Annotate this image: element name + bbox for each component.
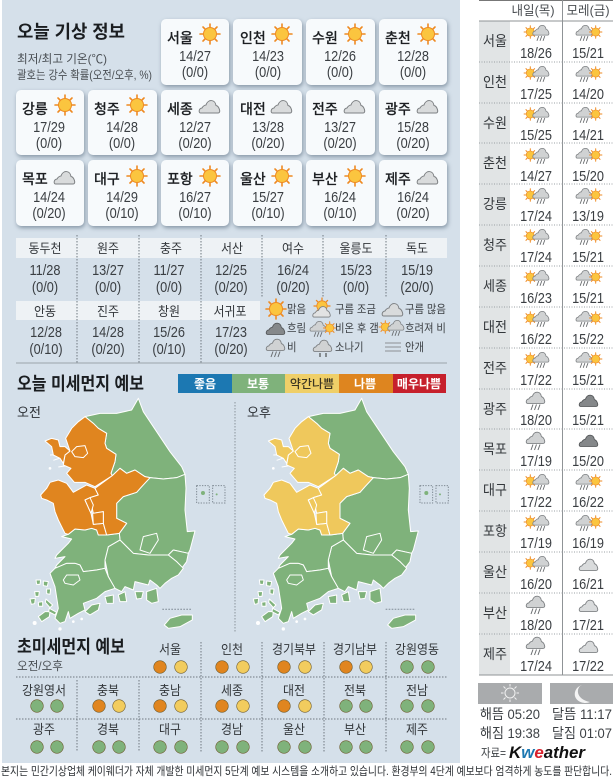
row: 서울: 18/26 [520, 44, 552, 61]
card: 청주: 청주 [94, 101, 120, 117]
row: 포항: 16/19 [572, 534, 604, 551]
sun times box: 해뜸 05:20 [480, 706, 540, 722]
row: 수원: 14/21 [572, 126, 604, 143]
card: 수원: 12/26 [324, 47, 356, 64]
fine dust grid: 세종 [221, 684, 243, 698]
card: 인천: 14/23 [252, 47, 284, 64]
card: 인천 [233, 19, 302, 85]
row: 춘천: 춘천 [483, 156, 507, 171]
subtitle text: 최저/최고 기온(℃) [17, 52, 107, 66]
legend: weather icons: 구름 많음 [405, 302, 446, 316]
fine dust grid: 전남 [406, 684, 429, 698]
row: 제주 [483, 637, 604, 674]
row: 강릉 [483, 188, 604, 224]
row: 세종 [483, 270, 604, 306]
row: 전주 [483, 352, 604, 388]
table: other cities forecast: (0/20) [214, 340, 248, 357]
legend: weather icons: 비온 후 갬 [335, 321, 379, 335]
table: other cities forecast: 11/27 [154, 261, 185, 278]
table: other cities forecast: (0/10) [152, 340, 186, 357]
legend: dust levels: 나쁨 [354, 377, 376, 391]
card: 세종: 12/27 [179, 118, 211, 135]
row: 전주: 15/21 [572, 371, 604, 388]
table: other cities forecast: 15/23 [340, 261, 372, 278]
column headers [512, 3, 610, 18]
row: 서울 [483, 25, 604, 61]
table: other cities forecast: 안동 [34, 305, 56, 319]
card: 강릉 [16, 90, 84, 155]
table: other cities forecast: 진주 [97, 305, 119, 319]
fine dust grid: 대전 [283, 684, 305, 698]
row: 대전: 대전 [483, 320, 507, 335]
legend: dust levels [178, 374, 446, 393]
row: 울산: 16/20 [520, 575, 552, 592]
fine dust grid: 제주 [406, 723, 428, 737]
map: morning dust [17, 398, 225, 631]
table: other cities forecast: (0/20) [91, 340, 125, 357]
table: other cities forecast: 독도 [406, 242, 428, 256]
card: 인천: (0/0) [255, 63, 281, 80]
card: 전주: (0/20) [323, 134, 357, 151]
row: 포항: 17/19 [520, 534, 552, 551]
row: 목포 [483, 432, 604, 469]
map: morning dust: 오전 [17, 405, 41, 420]
legend: dust levels: 좋음 [194, 377, 216, 391]
legend: weather icons: 흐려져 비 [405, 321, 446, 335]
subtitle text: 괄호는 강수 확률(오전/오후, %) [17, 68, 152, 82]
row: 춘천 [483, 148, 604, 184]
card: 세종 [161, 90, 229, 155]
map: afternoon dust: 오후 [247, 405, 271, 420]
column headers: 모레(금) [566, 3, 610, 18]
row: 대전: 15/22 [572, 330, 604, 347]
card: 청주: 14/28 [106, 118, 138, 135]
row: 목포: 17/19 [520, 452, 552, 469]
card: 포항: 16/27 [179, 188, 211, 205]
row: 대구: 17/22 [520, 493, 552, 510]
table: other cities forecast: 서산 [221, 242, 244, 256]
row: 목포: 목포 [483, 442, 507, 457]
row: 제주: 17/22 [572, 657, 604, 674]
card: 강릉: 17/29 [33, 118, 65, 135]
card: 부산 [306, 160, 375, 226]
fine dust grid: 울산 [283, 723, 306, 737]
label: 오전/오후: 오전/오후 [17, 659, 63, 673]
row: 춘천: 15/20 [572, 167, 604, 184]
fine dust grid: 서울 [159, 643, 181, 657]
fine dust grid: 충남 [159, 684, 182, 698]
column headers: 내일(목) [512, 3, 554, 18]
card: 부산: 16/24 [324, 188, 356, 205]
card: 대구: 대구 [94, 171, 120, 187]
card: 부산: 부산 [312, 171, 338, 187]
card: 서울 [161, 19, 229, 85]
card: 광주: 광주 [385, 101, 411, 117]
card: 울산: 15/27 [252, 188, 284, 205]
fine dust grid: 경기북부 [272, 643, 316, 657]
row: 광주: 15/21 [572, 411, 604, 428]
row: 제주: 17/24 [520, 657, 552, 674]
row: 인천: 17/25 [520, 85, 552, 102]
row: 부산 [483, 596, 604, 633]
card: 제주 [379, 160, 447, 226]
card: 전주: 13/27 [324, 118, 356, 135]
table: other cities forecast: 15/26 [153, 323, 185, 340]
card: 서울: 14/27 [179, 47, 211, 64]
weather cards grid [16, 19, 447, 226]
card: 목포: 목포 [22, 171, 48, 187]
card: 대전 [233, 90, 302, 155]
row: 인천: 14/20 [572, 85, 604, 102]
card: 제주: (0/20) [396, 204, 430, 221]
row: 광주 [483, 392, 604, 428]
row: 부산: 18/20 [520, 616, 552, 633]
row: 수원 [483, 107, 604, 143]
card: 춘천 [379, 19, 447, 85]
card: 광주: (0/20) [396, 134, 430, 151]
table: other cities forecast: (0/20) [214, 278, 248, 295]
card: 대구: (0/10) [105, 204, 139, 221]
legend: weather icons: 맑음 [287, 302, 306, 316]
table: other cities forecast: 울릉도 [339, 242, 373, 256]
row: 청주: 15/21 [572, 248, 604, 265]
row: 청주 [483, 229, 604, 265]
card: 포항: 포항 [167, 171, 193, 187]
card: 광주 [379, 90, 447, 155]
card: 청주: (0/0) [109, 134, 135, 151]
table: other cities forecast: 17/23 [215, 323, 247, 340]
row: 전주: 전주 [483, 361, 507, 376]
fine dust grid: 충북 [97, 684, 119, 698]
row: 춘천: 14/27 [520, 167, 552, 184]
card: 제주: 16/24 [397, 188, 429, 205]
moon times box: 달뜸 11:17 [552, 706, 612, 722]
card: 강릉: (0/0) [36, 134, 62, 151]
table: other cities forecast: 15/19 [401, 261, 433, 278]
divider line [16, 362, 447, 364]
table: other cities forecast: (0/20) [276, 278, 310, 295]
row: 세종: 세종 [483, 279, 507, 294]
row: 청주: 17/24 [520, 248, 552, 265]
panel: today's weather background [2, 0, 460, 763]
card: 포항: (0/10) [178, 204, 212, 221]
card: 대구: 14/29 [106, 188, 138, 205]
card: 인천: 인천 [240, 30, 266, 46]
row: 강릉: 강릉 [483, 197, 507, 212]
card: 수원: 수원 [312, 30, 338, 46]
card: 세종: (0/20) [178, 134, 212, 151]
row: 대전: 16/22 [520, 330, 552, 347]
table: other cities forecast: (0/0) [156, 278, 182, 295]
card: 대전: 13/28 [252, 118, 284, 135]
card: 서울: 서울 [167, 30, 193, 46]
row: 강릉: 13/19 [572, 207, 604, 224]
card: 춘천: (0/0) [400, 63, 426, 80]
row: 인천: 인천 [483, 75, 507, 90]
table: other cities forecast: (0/10) [29, 340, 63, 357]
row: 부산: 부산 [483, 606, 507, 621]
card: 전주: 전주 [312, 101, 338, 117]
card: 울산: (0/10) [251, 204, 285, 221]
table: other cities forecast: 16/24 [277, 261, 309, 278]
subtitle text [17, 52, 152, 82]
card: 목포: (0/20) [32, 204, 66, 221]
moon times box [550, 683, 613, 741]
row: 대구: 대구 [483, 483, 507, 498]
row: 부산: 17/21 [572, 616, 604, 633]
card: 세종: 세종 [167, 101, 193, 117]
table: other cities forecast: 충주 [160, 242, 182, 256]
card: 대전: (0/20) [251, 134, 285, 151]
table: other cities forecast: (0/0) [32, 278, 58, 295]
row: 강릉: 17/24 [520, 207, 552, 224]
row: 포항 [483, 515, 604, 551]
table: other cities forecast: (0/0) [95, 278, 121, 295]
card: 부산: (0/10) [323, 204, 357, 221]
table: other cities forecast: (0/0) [343, 278, 369, 295]
row: 서울: 15/21 [572, 44, 604, 61]
row: 광주: 18/20 [520, 411, 552, 428]
table: other cities forecast: 여수 [282, 242, 304, 256]
table: other cities forecast: 12/25 [215, 261, 247, 278]
legend: weather icons: 흐림 [287, 321, 306, 335]
title: 오늘 기상 정보: 오늘 기상 정보 [17, 22, 125, 42]
card: 목포: 14/24 [33, 188, 65, 205]
sun times box: 해짐 19:38 [480, 725, 540, 741]
fine dust grid: 경북 [97, 723, 119, 737]
row: 목포: 15/20 [572, 452, 604, 469]
legend: weather icons [266, 298, 446, 357]
row: 인천 [483, 66, 604, 102]
row: 전주: 17/22 [520, 371, 552, 388]
card: 전주 [306, 90, 375, 155]
table: other cities forecast: 11/28 [30, 261, 61, 278]
title: 초미세먼지 예보: 초미세먼지 예보 [17, 637, 125, 657]
fine dust grid: 강원영서 [22, 684, 66, 698]
fine dust grid: 대구 [159, 723, 181, 737]
fine dust grid: 인천 [221, 642, 243, 657]
row: 대구 [483, 474, 604, 510]
table: other cities forecast: 서귀포 [213, 305, 247, 319]
fine dust grid: 부산 [344, 723, 367, 737]
fine dust grid: 경남 [221, 723, 244, 737]
fine dust grid: 강원영동 [395, 643, 439, 657]
card: 울산: 울산 [240, 171, 266, 187]
row: 광주: 광주 [483, 402, 507, 417]
card: 강릉: 강릉 [22, 101, 48, 117]
row: 대구: 16/22 [572, 493, 604, 510]
row: 세종: 15/21 [572, 289, 604, 306]
map: afternoon dust [247, 398, 448, 631]
card: 춘천: 춘천 [385, 30, 411, 46]
row: 대전 [483, 311, 604, 347]
card: 울산 [233, 160, 302, 226]
row: 수원: 수원 [483, 116, 507, 131]
table: other cities forecast: 창원 [158, 305, 180, 319]
card: 목포 [16, 160, 84, 226]
fine dust grid [16, 642, 447, 753]
row: 서울: 서울 [483, 34, 507, 49]
card: 수원 [306, 19, 375, 85]
row: 울산 [483, 556, 604, 592]
legend: weather icons: 소나기 [335, 340, 364, 354]
panel: 2-day forecast table [479, 0, 613, 675]
card: 춘천: 12/28 [397, 47, 429, 64]
card: 서울: (0/0) [182, 63, 208, 80]
card: 대구 [88, 160, 157, 226]
table: other cities forecast: 14/28 [92, 323, 124, 340]
table: other cities forecast: 12/28 [30, 323, 62, 340]
source: Kweather: 자료= [481, 746, 506, 760]
row: 제주: 제주 [483, 647, 507, 662]
row: 수원: 15/25 [520, 126, 552, 143]
legend: dust levels: 보통 [247, 377, 269, 391]
legend: weather icons: 비 [287, 340, 297, 354]
card: 광주: 15/28 [397, 118, 429, 135]
card: 대전: 대전 [240, 101, 266, 117]
legend: weather icons: 안개 [405, 340, 424, 354]
row: 울산: 울산 [483, 565, 507, 580]
card: 제주: 제주 [385, 171, 411, 187]
table: other cities forecast: 13/27 [92, 261, 124, 278]
sun times box [478, 683, 542, 741]
table: other cities forecast [16, 235, 447, 363]
row: 세종: 16/23 [520, 289, 552, 306]
row: 울산: 16/21 [572, 575, 604, 592]
fine dust grid: 광주 [33, 723, 55, 737]
table: other cities forecast: 동두천 [28, 241, 62, 256]
moon times box: 달짐 01:07 [552, 725, 612, 741]
table: other cities forecast: 원주 [97, 242, 119, 256]
card: 수원: (0/0) [327, 63, 353, 80]
title: 오늘 미세먼지 예보: 오늘 미세먼지 예보 [17, 374, 144, 394]
legend: dust levels: 약간나쁨 [290, 377, 334, 391]
row: 포항: 포항 [483, 524, 507, 539]
card: 청주 [88, 90, 157, 155]
legend: weather icons: 구름 조금 [335, 302, 376, 316]
legend: dust levels: 매우나쁨 [397, 376, 441, 391]
vertical dotted divider between maps [234, 402, 236, 632]
source: Kweather: Kweather [509, 743, 586, 762]
table: other cities forecast: (20/0) [400, 278, 434, 295]
row: 청주: 청주 [483, 238, 507, 253]
card: 포항 [161, 160, 229, 226]
fine dust grid: 경기남부 [333, 643, 377, 657]
fine dust grid: 전북 [344, 684, 366, 698]
